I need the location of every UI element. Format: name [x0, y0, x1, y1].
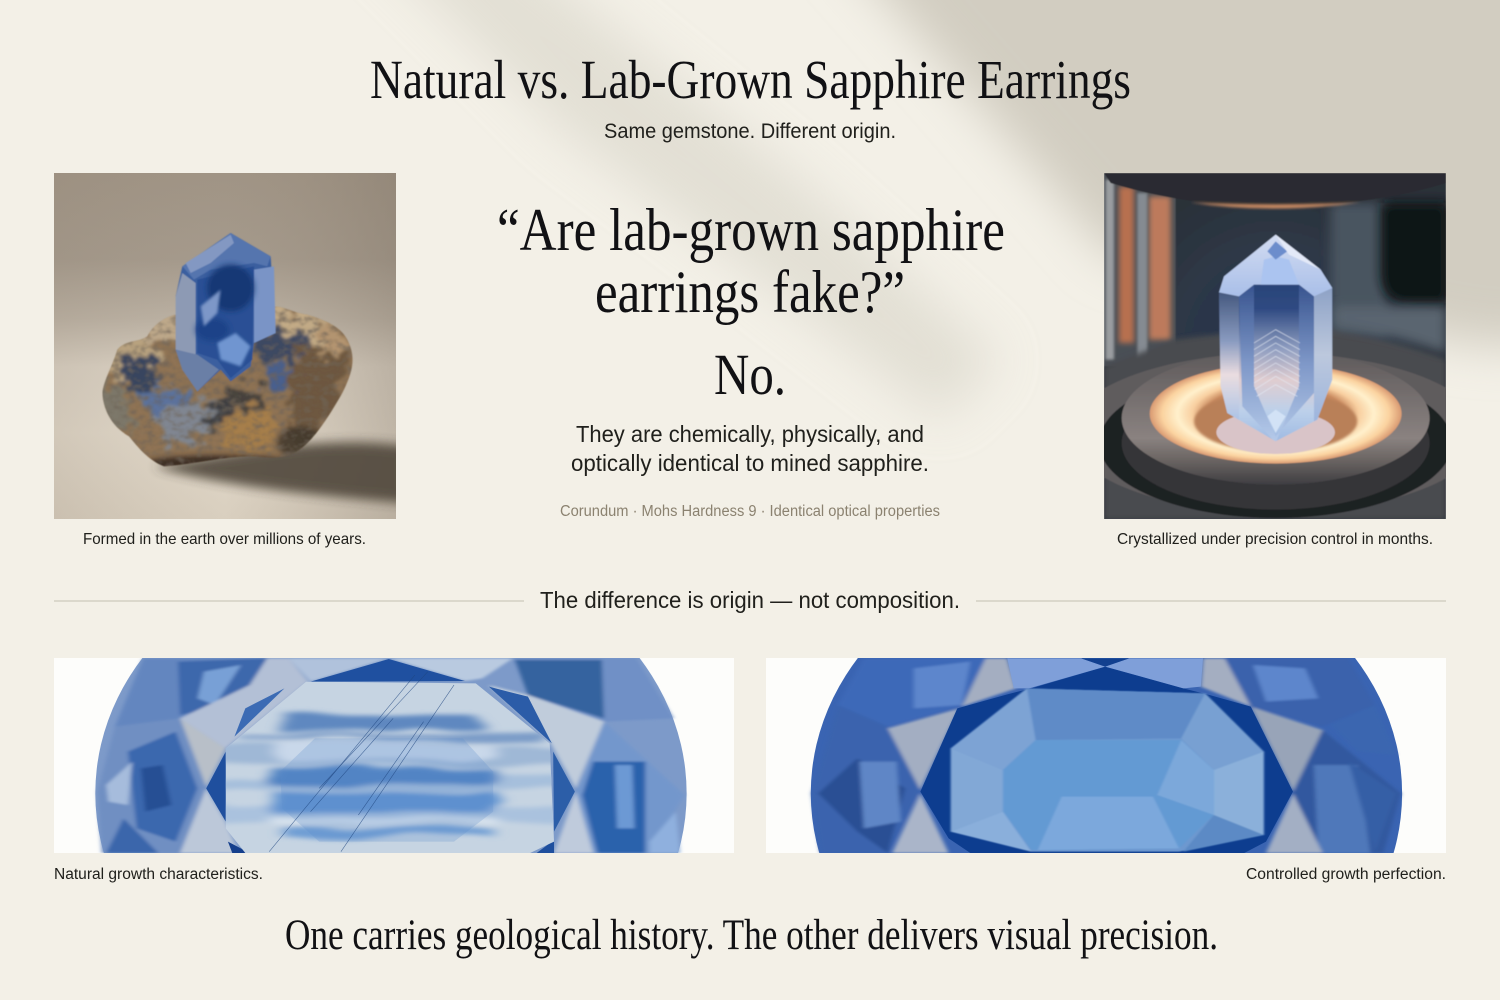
caption: natural gem: Natural growth characteristics.	[54, 866, 263, 883]
caption: natural crystal: Formed in the earth over millions of years.	[83, 531, 366, 548]
closing statement: One carries geological history. The other delivers visual precision.	[285, 912, 1218, 959]
explanation: optically identical to mined sapphire.	[571, 450, 929, 476]
panel: lab-grown sapphire gem close-up	[766, 658, 1446, 853]
subtitle: Same gemstone. Different origin.	[604, 119, 896, 143]
explanation: They are chemically, physically, and	[576, 421, 924, 447]
photo: lab-grown crystal in furnace	[1104, 173, 1446, 519]
central question: “Are lab-grown sapphire	[497, 197, 1005, 263]
inclusions	[269, 672, 454, 852]
properties line: Corundum · Mohs Hardness 9 · Identical optical properties	[560, 503, 940, 520]
caption: lab gem: Controlled growth perfection.	[1246, 866, 1446, 883]
crystal facets	[176, 256, 272, 388]
central question	[497, 197, 1005, 325]
title: Natural vs. Lab-Grown Sapphire Earrings	[370, 49, 1131, 110]
answer: No.	[714, 342, 786, 407]
divider statement: The difference is origin — not composition.	[540, 587, 960, 613]
caption: lab crystal: Crystallized under precision control in months.	[1117, 531, 1433, 548]
central question: earrings fake?”	[595, 259, 905, 325]
lab crystal body	[1218, 284, 1334, 442]
explanation	[571, 421, 929, 476]
growth bands	[226, 682, 554, 853]
panel: natural sapphire gem close-up	[54, 658, 734, 853]
photo: natural sapphire crystal on host rock	[54, 173, 407, 519]
